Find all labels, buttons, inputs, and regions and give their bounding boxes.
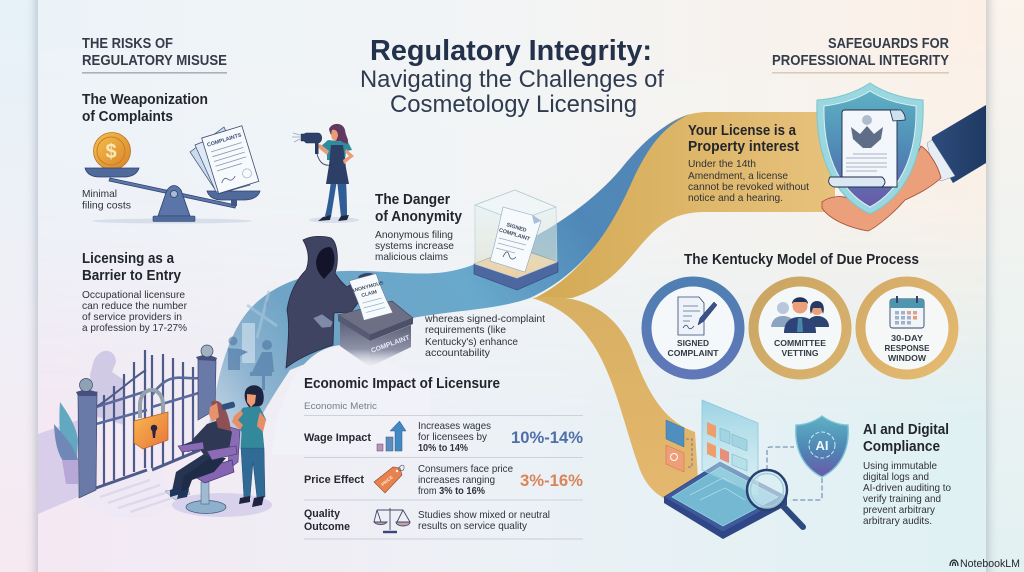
text: AI auditing: AI-driven auditing to	[863, 483, 951, 494]
heading: weaponization: of Complaints	[82, 109, 173, 125]
section heading: risks: THE RISKS OF	[82, 36, 173, 52]
icon: anonymous claim paper: ANONYMOUS	[351, 280, 385, 295]
step: response window: 30-DAY	[891, 333, 923, 343]
main title	[360, 35, 664, 118]
text: signed complaint requirements: whereas signed-complaint	[424, 314, 545, 325]
illustration: client in salon chair	[165, 401, 272, 517]
NotebookLM watermark: NotebookLM	[960, 558, 1020, 570]
icon: AI shield	[796, 416, 848, 477]
row: quality outcome: Outcome	[304, 521, 350, 533]
heading: AI and digital compliance	[863, 422, 949, 455]
text: anonymous filing: systems increase	[375, 241, 454, 252]
heading: property interest: Your License is a	[688, 123, 797, 139]
heading: economic impact: Economic Impact of Licensure	[304, 376, 500, 392]
ribbon: blue band	[205, 114, 690, 450]
step: committee vetting	[754, 282, 846, 374]
step: signed complaint	[646, 282, 740, 374]
icon: potted plant	[54, 402, 78, 484]
heading: danger of anonymity	[375, 192, 462, 225]
icon: calendar	[890, 296, 924, 328]
step: response window: RESPONSE	[884, 343, 930, 353]
heading: kentucky model: The Kentucky Model of Due Process	[684, 252, 919, 268]
row: price effect: increases ranging	[418, 475, 495, 486]
icon: price tag	[374, 465, 404, 493]
step: committee vetting: VETTING	[782, 348, 819, 358]
icon: ballot box: COMPLAINT	[370, 334, 411, 355]
icon: anonymous claim paper	[349, 272, 393, 322]
gate right post	[196, 345, 217, 420]
row: wage impact: Increases wages	[418, 421, 491, 432]
illustration: locked gate	[38, 345, 217, 518]
text: signed complaint requirements: Kentucky's) enhance	[425, 337, 518, 348]
text: fourteenth amendment: notice and a hearing.	[688, 193, 783, 204]
text: fourteenth amendment: Amendment, a license	[688, 171, 788, 182]
text: AI auditing: Using immutable	[863, 461, 937, 472]
text: fourteenth amendment	[688, 159, 809, 204]
text: occupational licensure: of service providers in	[82, 312, 182, 323]
icon: ballot box	[338, 272, 413, 367]
text: signed complaint requirements: accountability	[425, 348, 491, 359]
icon: fulcrum	[153, 186, 195, 222]
icon: tablet base	[664, 462, 787, 539]
row: price effect: Consumers face price	[418, 464, 513, 475]
ribbon: gold upper band	[535, 112, 835, 298]
icon: hair dryer	[301, 133, 332, 165]
text: AI auditing: prevent arbitrary	[863, 505, 936, 516]
illustration: woman with hair dryer	[292, 124, 359, 223]
section heading: risks	[82, 36, 227, 74]
row: quality outcome: results on service quality	[418, 521, 528, 532]
heading: danger of anonymity: of Anonymity	[375, 209, 462, 225]
icon: balance scales	[374, 508, 410, 532]
row: price effect: 3%-16%	[520, 471, 583, 490]
section heading: safeguards	[772, 36, 949, 74]
icon: rising bars	[377, 421, 406, 451]
caption: minimal filing costs: filing costs	[82, 200, 131, 212]
illustration: hooded figure	[286, 236, 373, 368]
icon: glass box with signed complaint: COMPLAINT	[498, 227, 531, 243]
row: wage impact: Wage Impact	[304, 432, 371, 444]
step: response window	[860, 282, 954, 374]
icon: document with pen	[678, 297, 717, 335]
icon: AI shield: AI	[816, 438, 828, 453]
text: anonymous filing	[375, 230, 454, 263]
row: wage impact: 10%-14%	[511, 428, 583, 447]
illustration: stylist	[221, 385, 266, 507]
icon: faded scissors	[247, 291, 277, 338]
row: wage impact: for licensees by	[418, 432, 488, 443]
text: occupational licensure: a profession by 17-27%	[82, 323, 187, 334]
row: quality outcome: Studies show mixed or neutral	[418, 510, 550, 521]
heading: danger of anonymity: The Danger	[375, 192, 450, 208]
row: price effect	[304, 464, 583, 497]
heading: barrier to entry: Barrier to Entry	[82, 268, 181, 284]
gate bars	[96, 350, 202, 488]
text: AI auditing: arbitrary audits.	[863, 516, 932, 527]
icon: glass box with signed complaint	[474, 190, 558, 290]
icon: coin	[94, 132, 130, 170]
section heading: safeguards: SAFEGUARDS FOR	[828, 36, 949, 52]
section heading: safeguards: PROFESSIONAL INTEGRITY	[772, 53, 949, 69]
heading: property interest: Property interest	[688, 139, 799, 155]
text: anonymous filing: Anonymous filing	[375, 230, 453, 241]
illustration: scale with coin and complaints	[85, 126, 260, 224]
text: signed complaint requirements	[424, 314, 545, 359]
row: price effect: from 3% to 16%	[418, 486, 485, 497]
text: anonymous filing: malicious claims	[375, 252, 448, 263]
step: response window: WINDOW	[888, 353, 927, 363]
text: fourteenth amendment: Under the 14th	[688, 159, 756, 170]
white table backdrop	[272, 345, 430, 455]
heading: AI and digital compliance: AI and Digital	[863, 422, 949, 438]
text: signed complaint requirements: requirements (like	[425, 325, 506, 336]
text: occupational licensure: can reduce the number	[82, 301, 188, 312]
text: AI auditing: verify training and	[863, 494, 941, 505]
step: signed complaint: COMPLAINT	[668, 348, 719, 358]
icon: shield	[817, 83, 923, 214]
text: AI auditing	[863, 461, 951, 527]
heading: weaponization	[82, 92, 208, 125]
row: wage impact	[304, 421, 583, 454]
main title: Cosmetology Licensing	[390, 91, 637, 118]
icon: complaint papers	[190, 126, 259, 194]
icon: anonymous claim paper: CLAIM	[361, 289, 378, 299]
heading: AI and digital compliance: Compliance	[863, 439, 940, 455]
text: fourteenth amendment: cannot be revoked without	[688, 182, 809, 193]
illustration: digital compliance device	[664, 400, 848, 539]
economic impact table	[304, 376, 583, 539]
caption: minimal filing costs	[82, 189, 131, 212]
icon: three people	[771, 297, 829, 333]
icon: complaint papers: COMPLAINTS	[206, 132, 243, 149]
row: quality outcome: Quality	[304, 508, 341, 520]
heading: property interest	[688, 123, 799, 155]
main title: Navigating the Challenges of	[360, 66, 664, 93]
heading: barrier to entry	[82, 251, 181, 284]
row: quality outcome	[304, 508, 550, 533]
icon: suit sleeve	[927, 105, 986, 183]
icon: scroll document	[829, 110, 905, 187]
illustration: shield in hand	[817, 83, 986, 231]
icon: floating window	[702, 400, 758, 495]
salon silhouettes	[228, 291, 277, 390]
icon: coin: $	[105, 141, 117, 163]
icon: price tag: PRICE	[380, 475, 394, 487]
icon: padlock	[134, 390, 168, 449]
column label: Economic Metric	[304, 401, 377, 412]
heading: weaponization: The Weaponization	[82, 92, 208, 108]
icon: magnifying glass	[747, 470, 803, 527]
ribbon: gold lower band	[532, 297, 700, 510]
step: signed complaint: SIGNED	[677, 338, 709, 348]
step: committee vetting: COMMITTEE	[774, 338, 826, 348]
heading: barrier to entry: Licensing as a	[82, 251, 175, 267]
icon: glass box with signed complaint: SIGNED	[506, 222, 527, 234]
row: price effect: Price Effect	[304, 474, 364, 486]
main title: Regulatory Integrity:	[370, 35, 652, 67]
text: occupational licensure: Occupational licensure	[82, 290, 185, 301]
icon: open hand	[822, 146, 941, 231]
text: occupational licensure	[82, 290, 188, 334]
row: wage impact: 10% to 14%	[418, 443, 468, 454]
section heading: risks: REGULATORY MISUSE	[82, 53, 227, 69]
icon: side cards	[666, 420, 692, 472]
gate left post	[76, 378, 97, 498]
text: AI auditing: digital logs and	[863, 472, 929, 483]
caption: minimal filing costs: Minimal	[82, 189, 117, 200]
